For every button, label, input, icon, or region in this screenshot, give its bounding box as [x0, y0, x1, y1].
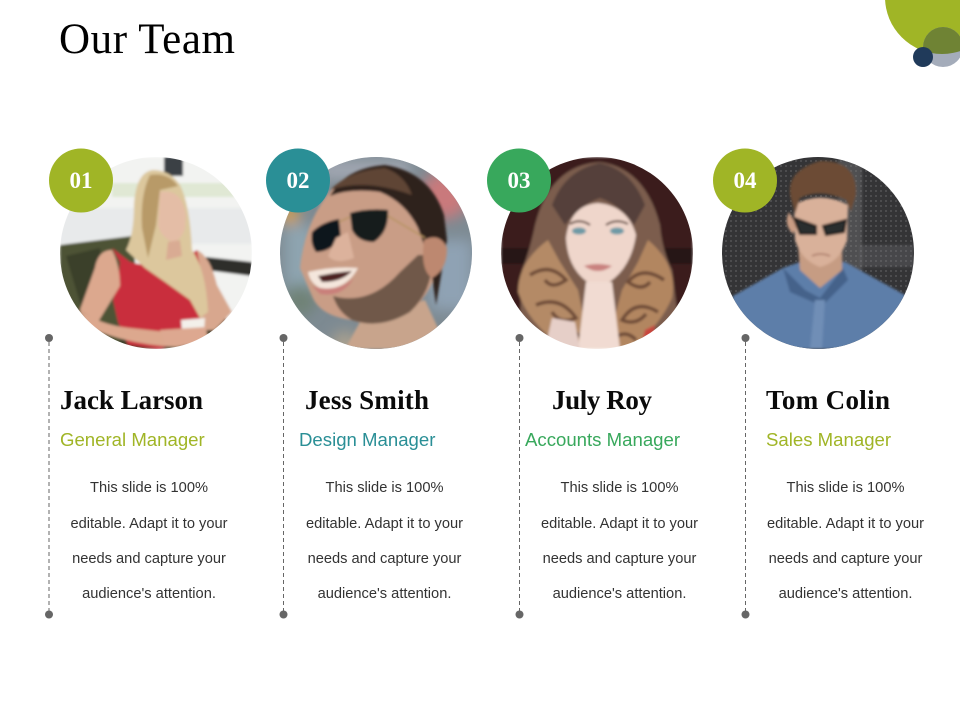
description [767, 480, 924, 602]
number badge 03 [487, 148, 551, 212]
corner decoration circles [885, 0, 960, 67]
number badge 01: 01 [70, 168, 92, 193]
timeline dashed connector [280, 334, 288, 618]
photo: woman with curly hair [501, 157, 693, 349]
name: Jess Smith [305, 385, 429, 415]
description: editable. Adapt it to your [541, 516, 698, 532]
description: needs and capture your [769, 551, 923, 567]
description: This slide is 100% [560, 480, 678, 496]
role: Accounts Manager [525, 429, 680, 450]
name: Tom Colin [766, 385, 890, 415]
description: editable. Adapt it to your [767, 516, 924, 532]
name: Jack Larson [60, 385, 203, 415]
description [541, 480, 698, 602]
timeline dashed connector [516, 334, 524, 618]
timeline dashed connector [45, 334, 53, 618]
description: audience's attention. [779, 586, 912, 602]
description [306, 480, 463, 602]
description: audience's attention. [82, 586, 216, 602]
number badge 03: 03 [508, 168, 530, 193]
role: Sales Manager [766, 429, 891, 450]
panel: Jess Smith [266, 148, 472, 618]
description [70, 480, 228, 602]
title: Our Team [59, 16, 235, 63]
name: July Roy [552, 385, 652, 415]
panel: Jack Larson [45, 148, 252, 618]
number badge 02: 02 [286, 168, 310, 193]
description: needs and capture your [543, 551, 697, 567]
panel: July Roy [487, 148, 698, 618]
description: audience's attention. [553, 586, 686, 602]
description: audience's attention. [318, 586, 451, 602]
description: editable. Adapt it to your [70, 516, 228, 532]
description: needs and capture your [72, 551, 226, 567]
photo: woman in red dress [60, 157, 252, 349]
description: This slide is 100% [786, 480, 904, 496]
number badge 04 [713, 148, 777, 212]
description: editable. Adapt it to your [306, 516, 463, 532]
role: Design Manager [299, 429, 435, 450]
number badge 02 [266, 148, 330, 212]
description: needs and capture your [308, 551, 462, 567]
number badge 01 [49, 148, 113, 212]
panel: Tom Colin [713, 148, 924, 618]
photo: smiling man with sunglasses [280, 157, 472, 359]
number badge 04: 04 [734, 168, 757, 193]
photo: young man with glasses [722, 157, 914, 349]
description: This slide is 100% [326, 480, 444, 496]
description: This slide is 100% [90, 480, 208, 496]
timeline dashed connector [742, 334, 750, 618]
role: General Manager [60, 429, 205, 450]
